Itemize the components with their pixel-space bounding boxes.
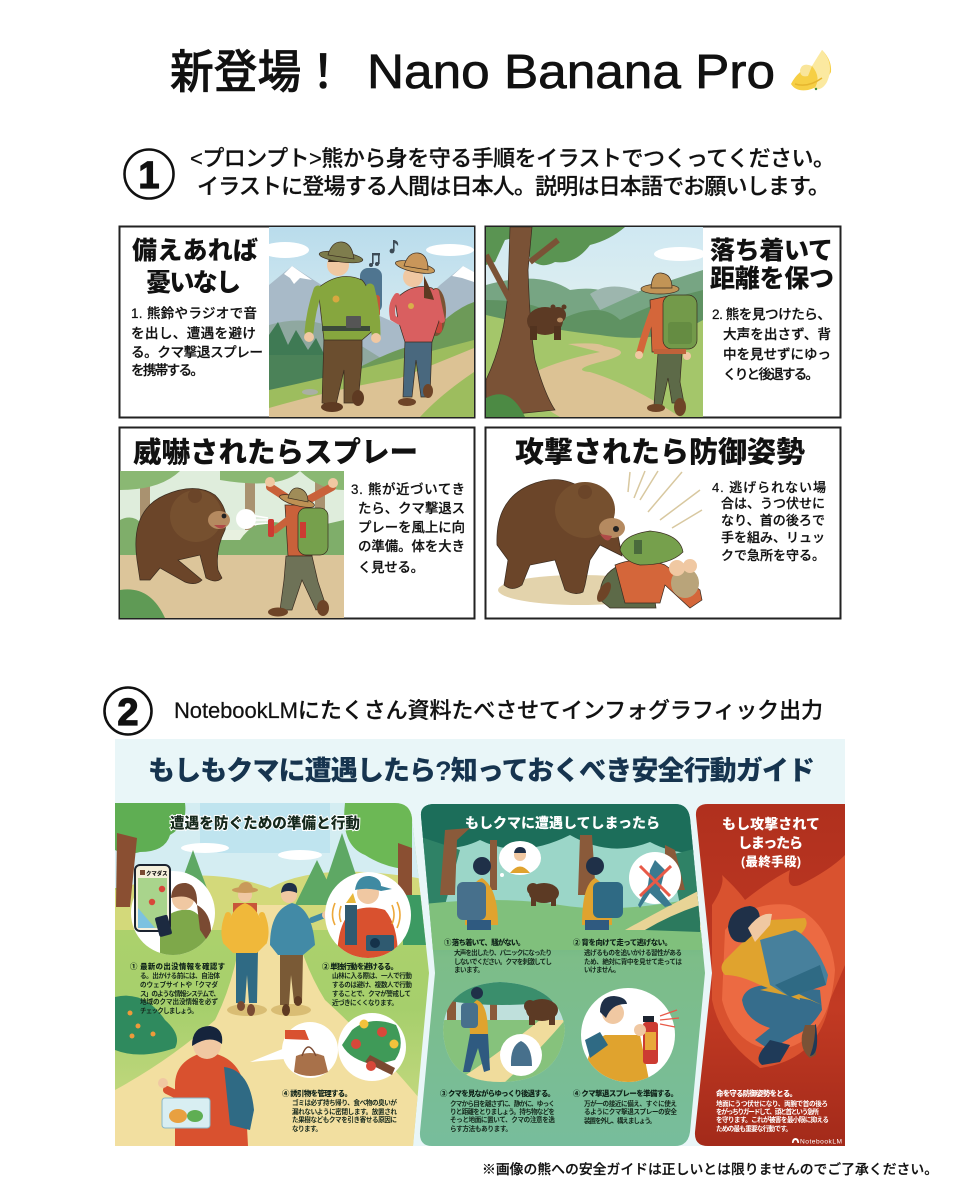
item 1 text: 地域のクマ出没情報を必ず xyxy=(140,997,218,1006)
notebooklm logo: NotebookLM xyxy=(800,1138,842,1146)
item 2 text: ② 単独行動を避けるる。 xyxy=(322,962,398,971)
item 3 text: りと距離をとりましょう。持ち物などを xyxy=(450,1107,555,1116)
item 4 text: ④ クマ撃退スプレーを準備する。 xyxy=(573,1089,678,1098)
step 2 number badge: 2 xyxy=(117,692,139,734)
body text: 4. 逃げられない場 xyxy=(712,480,826,495)
hiker: woman xyxy=(392,253,446,406)
infographic: bear encounter safety guide xyxy=(115,739,845,1146)
right panel text: 命を守る防御姿勢をとる。 xyxy=(716,1089,797,1098)
illustration: bear and hiker with spray xyxy=(120,471,344,618)
prompt text xyxy=(190,146,835,199)
step 2 number badge xyxy=(104,688,152,734)
body text: プレーを風上に向 xyxy=(358,520,465,535)
body text xyxy=(351,481,465,575)
illustration: man with bell and radio xyxy=(325,872,411,958)
heading: 攻撃されたら防御姿勢 xyxy=(515,436,805,469)
body text xyxy=(131,305,263,378)
heading: 備えあれば xyxy=(132,237,258,265)
right panel text: を守ります。これが被害を最小限に抑える xyxy=(716,1115,829,1124)
spray cloud xyxy=(236,509,268,529)
section 2 caption: NotebookLMにたくさん資料たべさせてインフォグラフィック出力 xyxy=(174,698,823,723)
right panel text: 地面にうつ伏せになり、両腕で首の後ろ xyxy=(716,1099,828,1108)
item 2 text: 近づきにくくなります。 xyxy=(332,998,398,1007)
item 4 text: るようにクマ撃退スプレーの安全 xyxy=(584,1107,677,1116)
item 4 text: ゴミは必ず持ち帰り、食べ物の臭いが xyxy=(292,1098,397,1107)
right panel heading: しまったら xyxy=(738,835,803,851)
heading xyxy=(710,237,834,293)
body text: 合は、うつ伏せに xyxy=(721,496,825,511)
item 1 text: ① 落ち着いて、騒がない。 xyxy=(444,938,525,947)
heading: 距離を保つ xyxy=(710,265,834,293)
item 4 text xyxy=(573,1089,678,1125)
heading: 憂いなし xyxy=(146,269,241,297)
body text: なり、首の後ろで xyxy=(721,513,825,528)
illustration: two hikers on a mountain trail xyxy=(261,227,474,417)
right panel text xyxy=(716,1089,829,1133)
item 2 text xyxy=(573,938,682,974)
illustration: man storing food in box xyxy=(158,1026,254,1146)
body text: く見せる。 xyxy=(358,560,424,575)
item 2 text: いけません。 xyxy=(584,966,620,974)
body text: 中を見せずにゆっ xyxy=(723,347,831,362)
right panel heading: (最終手段) xyxy=(741,854,801,869)
title: Nano Banana Pro xyxy=(367,46,775,99)
panel: stay calm xyxy=(486,226,840,418)
item 1 text: しないでください。クマを刺激してし xyxy=(454,957,552,966)
item 2 text: 山林に入る際は、一人で行動 xyxy=(332,971,412,980)
item 2 text: ② 背を向けて走って逃げない。 xyxy=(573,938,672,947)
item 4 text: ④ 誘引物を管理する。 xyxy=(282,1089,352,1098)
panel: use spray xyxy=(120,428,474,618)
item 2 text: 逃げるものを追いかける習性がある xyxy=(584,948,682,957)
body text: 3. 熊が近づいてき xyxy=(351,481,465,497)
item 2 text xyxy=(322,962,412,1007)
illustration: person watches bear xyxy=(457,841,559,930)
item 1 text: チェックしましょう。 xyxy=(140,1006,198,1015)
item 1 text: のウェブサイトや「クマダ xyxy=(140,980,218,989)
item 4 text: なります。 xyxy=(292,1124,322,1133)
panel: defensive posture xyxy=(486,428,840,618)
item 3 text: らす方法もあります。 xyxy=(450,1124,512,1133)
heading xyxy=(132,237,258,297)
illustration: woman checking app xyxy=(131,865,215,957)
item 2 text: ため、絶対に背中を見せて走っては xyxy=(584,957,682,966)
left panel heading: 遭遇を防ぐための準備と行動 xyxy=(170,814,360,832)
item 1 text: 大声を出したり、パニックになったり xyxy=(454,948,552,957)
item 4 text: 装置を外し、構えましょう。 xyxy=(584,1116,656,1125)
illustration: person and do-not-run icon xyxy=(582,852,681,930)
body text: を出し、遭遇を避け xyxy=(131,326,256,341)
item 4 text: 漏れないように密閉します。放置され xyxy=(292,1107,397,1116)
item 4 text xyxy=(282,1089,397,1133)
tree canopy xyxy=(486,227,625,265)
prompt text: イラストに登場する人間は日本人。説明は日本語でお願いします。 xyxy=(197,174,830,199)
illustration: woman checking app: クマダス xyxy=(146,870,168,878)
item 3 text: ③ クマを見ながらゆっくり後退する。 xyxy=(440,1089,555,1098)
body text: くりと後退する。 xyxy=(723,367,819,382)
body text: の準備。体を大き xyxy=(358,539,465,554)
right panel heading xyxy=(722,816,820,869)
item 3 text xyxy=(440,1089,555,1133)
body text: クで急所を守る。 xyxy=(721,548,825,563)
illustration: hiker sees bear on path xyxy=(486,227,706,417)
illustration: defensive crouch xyxy=(722,906,828,1065)
body text: 大声を出さず、背 xyxy=(723,326,831,342)
footnote: ※画像の熊への安全ガイドは正しいとは限りませんのでご了承ください。 xyxy=(482,1161,938,1177)
body text xyxy=(712,480,826,563)
item 2 text: することで、クマが警戒して xyxy=(332,989,411,998)
panel: if you encounter a bear xyxy=(415,804,710,1146)
step 1 number badge xyxy=(124,150,174,198)
step 1 number badge: 1 xyxy=(138,155,160,197)
hiker: man xyxy=(304,242,382,412)
bear xyxy=(136,488,230,584)
illustration: two hikers xyxy=(224,882,330,1016)
right panel heading: もし攻撃されて xyxy=(722,816,820,832)
title xyxy=(170,46,775,99)
heading: 落ち着いて xyxy=(710,237,833,265)
body text xyxy=(712,306,831,382)
body text: る。クマ撃退スプレー xyxy=(131,345,263,360)
item 1 text: ① 最新の出没情報を確認す xyxy=(130,962,225,971)
item 1 text xyxy=(130,962,225,1015)
body text: 1. 熊鈴やラジオで音 xyxy=(131,305,257,321)
panel: prevention xyxy=(115,803,429,1146)
item 4 text: 万が一の接近に備え、すぐに使え xyxy=(584,1099,677,1108)
icon: music notes xyxy=(369,240,398,267)
item 1 text: ス」のような情報システムで、 xyxy=(140,989,220,998)
illustration: bear and person crouching xyxy=(497,471,702,608)
body text: 手を組み、リュッ xyxy=(721,530,825,545)
infographic title: もしもクマに遭遇したら?知っておくべき安全行動ガイド xyxy=(148,756,815,786)
panel: if attacked xyxy=(690,804,845,1146)
item 3 text: そっと地面に置いて、クマの注意を逸 xyxy=(450,1115,555,1124)
right panel text: をがっちりガードして、頭と首という急所 xyxy=(716,1107,819,1116)
body text: たら、クマ撃退ス xyxy=(358,501,465,516)
item 4 text: た果樹などもクマを引き寄せる原因に xyxy=(292,1115,397,1124)
illustration: bag and fruit tree xyxy=(250,1013,406,1081)
icon: banana xyxy=(791,50,831,90)
heading: 威嚇されたらスプレー xyxy=(133,436,418,469)
bear xyxy=(527,304,566,340)
right panel text: ための最も重要な行動です。 xyxy=(716,1124,792,1133)
prompt text: <プロンプト>熊から身を守る手順をイラストでつくってください。 xyxy=(190,146,835,171)
item 2 text: するのは避け、複数人で行動 xyxy=(332,980,412,989)
panel: be prepared xyxy=(120,226,474,418)
hiker xyxy=(265,477,338,616)
mid panel heading: もしクマに遭遇してしまったら xyxy=(465,815,660,831)
item 1 text: まいます。 xyxy=(454,966,484,974)
illustration: readying bear spray xyxy=(581,988,679,1085)
item 3 text: クマから目を離さずに、静かに、ゆっく xyxy=(450,1099,555,1108)
crouching person xyxy=(600,565,656,608)
item 1 text xyxy=(444,938,552,974)
title: 新登場！ xyxy=(170,46,345,98)
hiker from behind xyxy=(635,273,697,416)
body text: を携帯する。 xyxy=(131,362,204,378)
item 1 text: る。出かける前には、自治体 xyxy=(140,971,220,980)
body text: 2. 熊を見つけたら、 xyxy=(712,306,831,322)
illustration: backing away from bear xyxy=(443,982,565,1082)
